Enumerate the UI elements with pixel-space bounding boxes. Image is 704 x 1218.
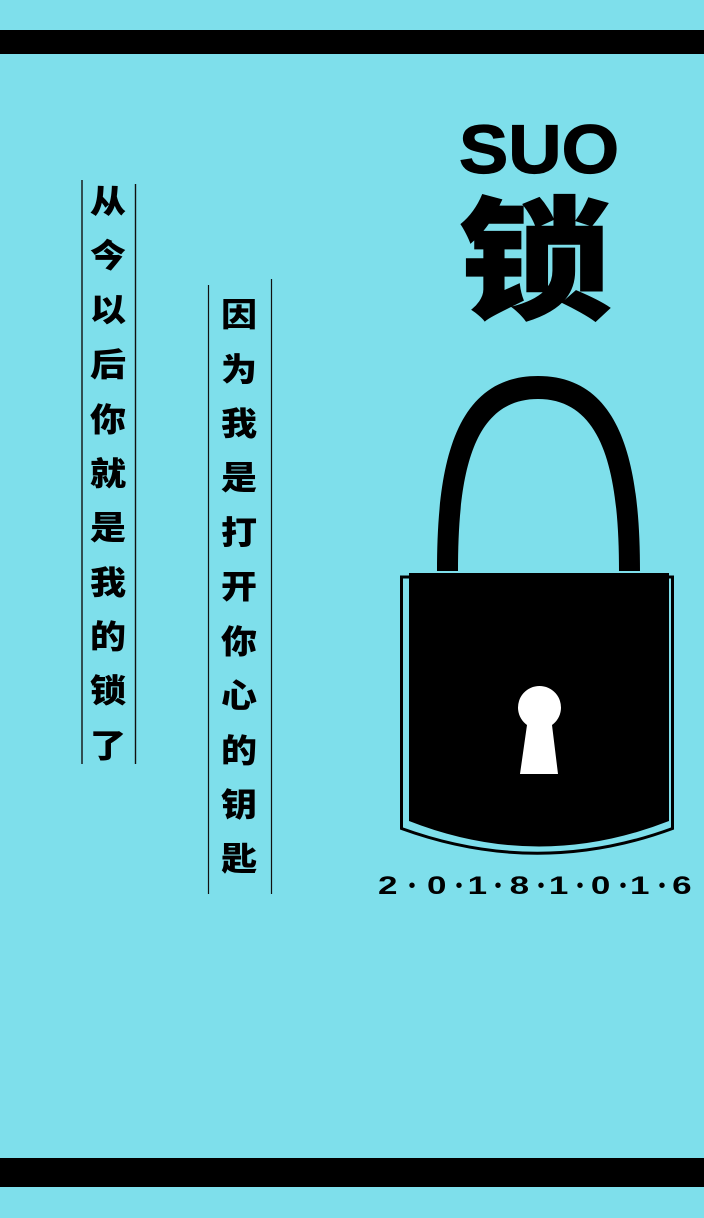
vertical text: left column: 你 xyxy=(90,403,126,439)
vertical text: left column: 从 xyxy=(90,185,126,221)
vertical text: right column: 打 xyxy=(221,516,257,552)
date: 6 xyxy=(672,872,692,900)
vertical text: left column: 我 xyxy=(90,566,126,602)
vertical text: right column: 因 xyxy=(221,298,257,334)
date: • xyxy=(408,875,416,897)
padlock outer outline xyxy=(402,577,672,853)
date: 1 xyxy=(549,872,568,900)
padlock body xyxy=(409,573,669,846)
date: 1 xyxy=(630,872,650,900)
vertical text: right column: 的 xyxy=(221,734,257,770)
vertical text: left column: 以 xyxy=(90,293,126,329)
icon: padlock xyxy=(402,376,672,853)
date: • xyxy=(494,875,502,897)
top black bar xyxy=(0,30,704,54)
padlock shackle xyxy=(437,376,640,571)
vertical text: left column: 锁 xyxy=(90,674,126,710)
date xyxy=(378,872,692,900)
title: SUO: SUO xyxy=(459,111,619,188)
date: 1 xyxy=(468,872,487,900)
bottom black bar xyxy=(0,1158,704,1187)
vertical text: right column: 你 xyxy=(221,625,257,661)
date: 0 xyxy=(427,872,447,900)
date: 0 xyxy=(591,872,610,900)
vertical text: left column: 后 xyxy=(90,348,126,384)
title: 锁: 锁 xyxy=(459,189,611,337)
date: 8 xyxy=(510,872,529,900)
date: • xyxy=(537,875,545,897)
date: • xyxy=(619,875,627,897)
vertical text: left column: 是 xyxy=(90,511,126,547)
vertical text: right column: 心 xyxy=(221,679,257,715)
vertical text: right column: 匙 xyxy=(221,842,257,878)
vertical text: left column xyxy=(82,180,136,765)
date: • xyxy=(658,875,666,897)
vertical text: right column: 为 xyxy=(221,353,257,389)
vertical text: right column xyxy=(208,279,272,894)
vertical text: left column: 今 xyxy=(90,238,126,275)
date: 2 xyxy=(378,872,398,900)
vertical text: right column: 开 xyxy=(221,570,257,606)
vertical text: right column: 我 xyxy=(221,407,257,443)
keyhole xyxy=(518,686,561,774)
vertical text: left column: 就 xyxy=(90,457,126,493)
vertical text: left column: 的 xyxy=(90,620,126,656)
date: • xyxy=(455,875,463,897)
vertical text: right column: 钥 xyxy=(221,788,257,824)
vertical text: right column: 是 xyxy=(221,461,257,497)
vertical text: left column: 了 xyxy=(90,729,126,765)
date: • xyxy=(576,875,584,897)
